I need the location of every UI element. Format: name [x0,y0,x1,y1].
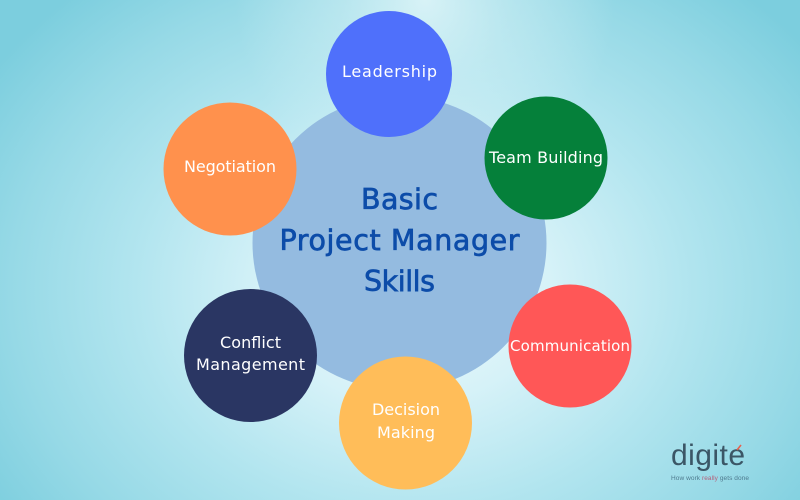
title: Project Manager [280,224,520,257]
title [280,183,520,298]
central circle [252,96,546,390]
skill: Communication [508,284,632,408]
skill: Conflict Management [184,289,317,422]
skill: Conflict Management: Management [196,355,305,374]
logo: digité: How work really gets done [671,475,749,482]
skill: Decision Making: Decision [372,400,440,419]
skill: Leadership: Leadership [342,62,437,81]
skill: Negotiation: Negotiation [184,157,276,176]
skill: Negotiation [164,102,296,236]
skill: Team Building [484,96,608,220]
skill: Team Building: Team Building [488,148,603,167]
logo: digité: digite [671,439,745,472]
title: Basic [361,183,438,216]
skill: Conflict Management: Conflict [220,333,281,352]
title: Skills [364,265,435,298]
skill: Communication: Communication [510,337,630,355]
skill: Decision Making: Making [377,423,435,442]
skill: Leadership [326,11,452,137]
skill: Decision Making [339,356,472,490]
